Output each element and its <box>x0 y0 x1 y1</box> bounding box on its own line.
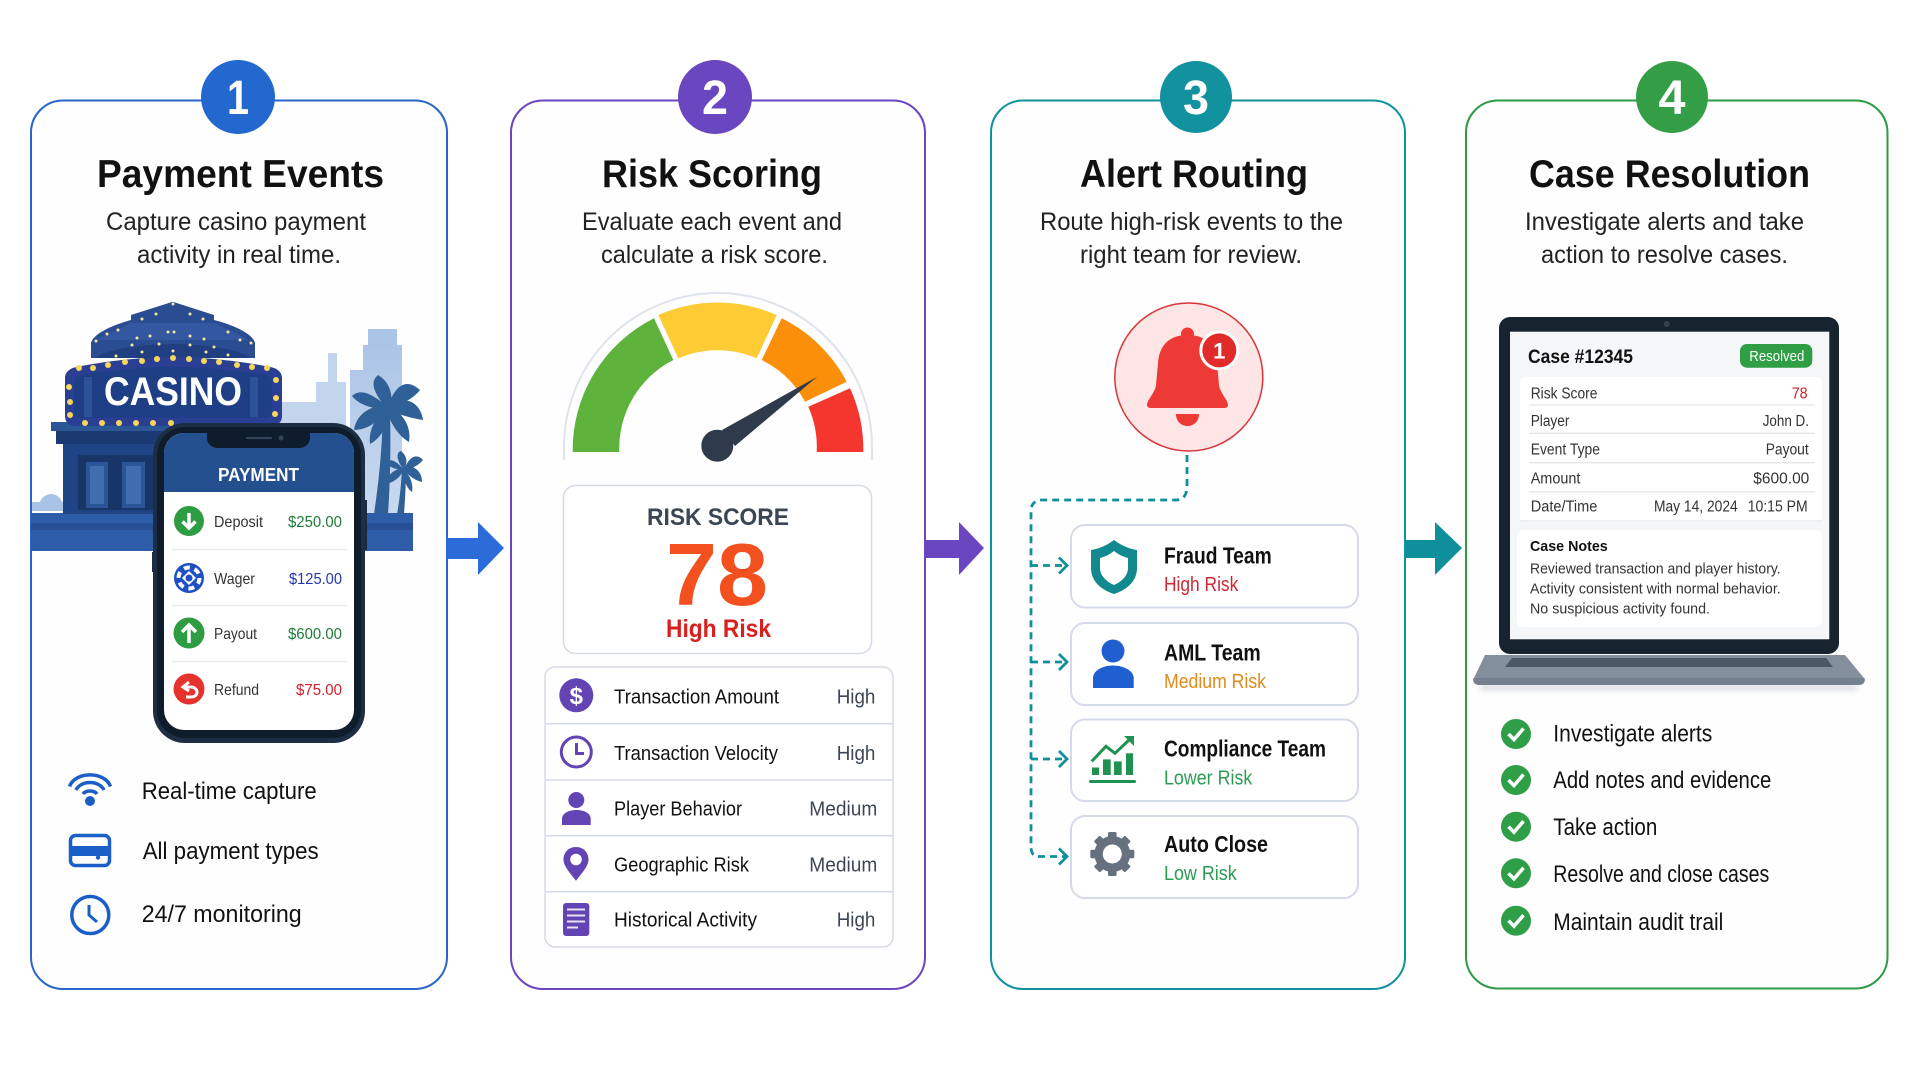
table: risk factors <box>545 667 893 947</box>
card: aml team: Medium Risk <box>1164 671 1267 693</box>
subtitle: alert routing: right team for review. <box>1080 241 1302 269</box>
subtitle: risk scoring: Evaluate each event and <box>582 208 842 236</box>
factor: transaction amount <box>559 678 875 712</box>
row: payout: $600.00 <box>288 626 342 643</box>
factor: transaction velocity <box>561 737 875 767</box>
phone: payment list <box>152 423 367 743</box>
item: maintain audit trail: Maintain audit trail <box>1553 909 1723 936</box>
case header: Case #12345 <box>1528 346 1633 368</box>
arrow: step 3 to 4 <box>1406 522 1462 575</box>
case fields: Player <box>1531 413 1569 430</box>
icon: alert bell <box>1115 303 1263 451</box>
heading: alert routing: Alert Routing <box>1080 153 1308 196</box>
item: investigate alerts <box>1501 719 1712 749</box>
subtitle: payment events: activity in real time. <box>137 241 341 269</box>
row: refund: Refund <box>214 682 259 699</box>
factor: transaction velocity: Transaction Velocity <box>614 742 779 765</box>
card: compliance team: Lower Risk <box>1164 768 1253 790</box>
factor: historical activity: Historical Activity <box>614 909 758 932</box>
card: risk score <box>564 486 872 654</box>
card: risk score: RISK SCORE <box>647 504 789 531</box>
panel: payment events <box>31 60 447 989</box>
factor: geographic risk <box>564 847 877 881</box>
subtitle: case resolution: action to resolve cases. <box>1541 241 1788 269</box>
subtitle: payment events: Capture casino payment <box>106 208 366 236</box>
factor: transaction amount: High <box>837 685 875 708</box>
row: wager: Wager <box>214 571 256 588</box>
illustration: casino skyline: CASINO <box>104 370 242 414</box>
case fields: Event Type <box>1531 441 1600 458</box>
factor: historical activity: High <box>837 909 875 932</box>
item: take action <box>1501 812 1657 842</box>
gauge needle <box>701 377 817 462</box>
row: deposit: Deposit <box>214 514 264 531</box>
case notes <box>1530 538 1781 617</box>
card: auto close: Auto Close <box>1164 831 1268 857</box>
factor: player behavior: Player Behavior <box>614 798 742 821</box>
subtitle: alert routing: Route high-risk events to the <box>1040 208 1343 236</box>
case fields: $600.00 <box>1753 470 1810 487</box>
subtitle: risk scoring <box>582 208 842 269</box>
factor: player behavior: Medium <box>809 798 877 821</box>
feature: real-time capture: Real-time capture <box>142 778 317 805</box>
card: compliance team <box>1071 720 1358 801</box>
step badge 1: 1 <box>227 72 249 125</box>
item: maintain audit trail <box>1501 906 1723 936</box>
row: deposit: $250.00 <box>288 514 342 531</box>
case header: Resolved <box>1749 348 1804 365</box>
item: add notes and evidence <box>1501 765 1771 795</box>
row: payout: Payout <box>214 626 257 643</box>
card: auto close <box>1071 816 1358 898</box>
subtitle: payment events <box>106 208 366 269</box>
routing connectors <box>1031 455 1187 864</box>
step badge 4: 4 <box>1658 72 1686 125</box>
feature: 24/7 monitoring: 24/7 monitoring <box>142 901 302 928</box>
step badge 3: 3 <box>1183 72 1209 125</box>
factor: transaction amount: Transaction Amount <box>614 685 779 708</box>
card: risk score: High Risk <box>666 615 771 643</box>
case fields: Risk Score <box>1531 385 1597 402</box>
row: wager <box>174 563 342 593</box>
card: auto close: Low Risk <box>1164 863 1238 885</box>
panel: risk scoring <box>511 60 925 989</box>
item: resolve and close cases: Resolve and close cases <box>1553 861 1769 888</box>
heading: risk scoring: Risk Scoring <box>602 153 822 196</box>
case notes: Activity consistent with normal behavior. <box>1530 581 1781 597</box>
step badge 2: 2 <box>702 72 728 125</box>
card: compliance team: Compliance Team <box>1164 736 1326 762</box>
case fields: 78 <box>1792 385 1808 402</box>
icon: alert bell: 1 <box>1213 338 1225 364</box>
item: add notes and evidence: Add notes and evidence <box>1553 767 1771 794</box>
arrow: step 1 to 2 <box>447 522 504 575</box>
case header <box>1528 344 1812 368</box>
subtitle: case resolution: Investigate alerts and take <box>1525 208 1804 236</box>
case notes: Reviewed transaction and player history. <box>1530 561 1781 577</box>
heading: payment events: Payment Events <box>97 153 384 196</box>
card: risk score: 78 <box>666 525 768 624</box>
subtitle: alert routing <box>1040 208 1343 269</box>
card: fraud team <box>1071 525 1358 608</box>
item: investigate alerts: Investigate alerts <box>1553 721 1712 748</box>
feature: 24/7 monitoring <box>72 896 302 934</box>
case notes: No suspicious activity found. <box>1530 601 1710 617</box>
factor: geographic risk: Medium <box>809 854 877 877</box>
case notes: Case Notes <box>1530 538 1608 555</box>
factor: transaction amount: $ <box>570 683 584 710</box>
case fields: John D. <box>1763 413 1809 430</box>
case fields: May 14, 2024 <box>1654 499 1738 516</box>
row: deposit <box>174 506 342 536</box>
row: payout <box>174 618 342 648</box>
row: refund <box>174 674 342 704</box>
card: fraud team: High Risk <box>1164 574 1239 596</box>
factor: player behavior <box>562 792 877 825</box>
arrow: step 2 to 3 <box>926 522 984 575</box>
row: wager: $125.00 <box>289 571 342 588</box>
card: fraud team: Fraud Team <box>1164 542 1272 568</box>
case fields: Date/Time <box>1531 499 1597 516</box>
feature: all payment types: All payment types <box>143 838 319 865</box>
factor: transaction velocity: High <box>837 742 875 765</box>
case fields <box>1531 385 1810 516</box>
case fields: Amount <box>1531 470 1581 487</box>
phone: payment list: PAYMENT <box>218 465 299 485</box>
row: refund: $75.00 <box>296 682 342 699</box>
factor: geographic risk: Geographic Risk <box>614 854 750 877</box>
feature: all payment types <box>70 836 319 866</box>
feature: real-time capture <box>70 775 317 806</box>
subtitle: risk scoring: calculate a risk score. <box>601 241 828 269</box>
step badge 2 <box>678 60 752 134</box>
laptop: case details <box>1473 317 1865 690</box>
illustration: casino skyline <box>31 302 423 551</box>
card: aml team <box>1071 623 1358 705</box>
item: take action: Take action <box>1553 814 1657 841</box>
case fields: 10:15 PM <box>1748 499 1808 516</box>
step badge 4 <box>1636 61 1708 133</box>
checklist: actions <box>1501 719 1771 936</box>
step badge 3 <box>1160 61 1232 133</box>
chart: risk gauge <box>564 293 872 462</box>
item: resolve and close cases <box>1501 858 1769 888</box>
factor: historical activity <box>563 903 875 936</box>
panel: case resolution <box>1466 61 1888 988</box>
heading: case resolution: Case Resolution <box>1529 153 1810 196</box>
panel: alert routing <box>991 61 1405 989</box>
card: aml team: AML Team <box>1164 640 1261 666</box>
step badge 1 <box>201 60 275 134</box>
case fields: Payout <box>1766 441 1809 458</box>
subtitle: case resolution <box>1525 208 1804 269</box>
